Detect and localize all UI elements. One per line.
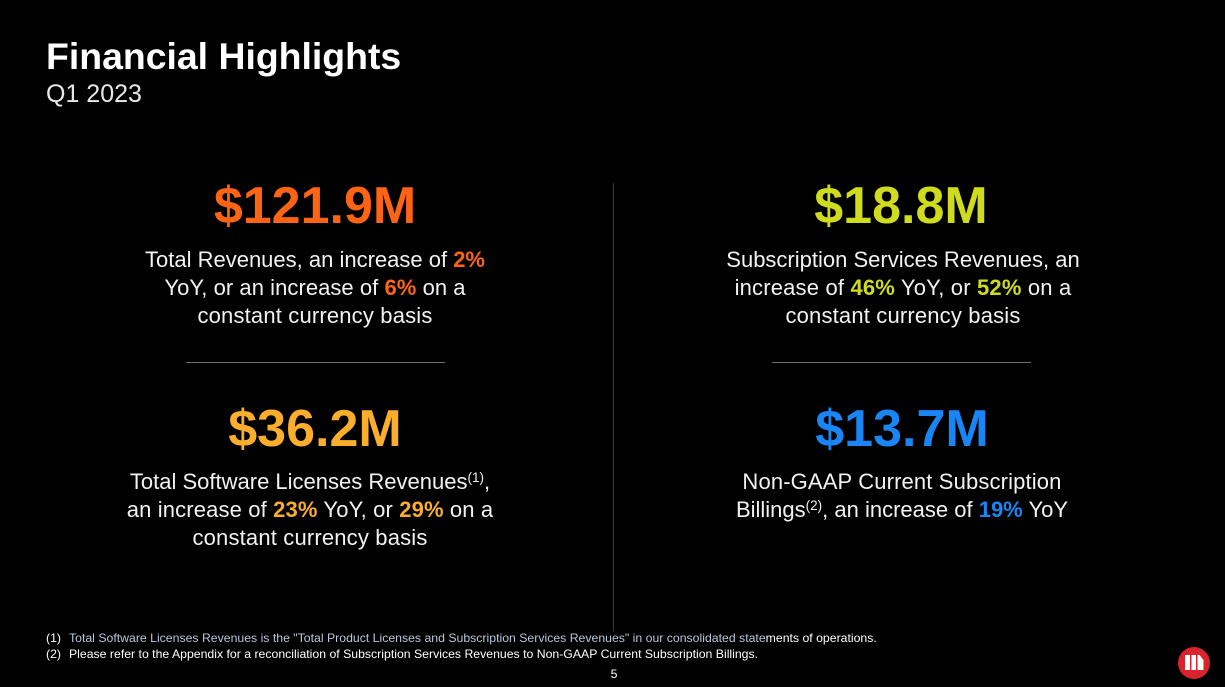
metric: subscription services value: $18.8M [814,177,988,235]
metric: total revenues value: $121.9M [214,177,416,235]
metric: software licenses value: $36.2M [228,400,402,458]
metric: software licenses description: an increase of 23% YoY, or 29% on a [127,497,493,522]
metric: subscription billings description [736,469,1068,522]
vertical divider [613,183,614,631]
metric: software licenses description: constant currency basis [192,525,428,550]
footnote 2: (2) [46,647,61,661]
title: Financial Highlights [46,35,401,77]
metric: subscription billings value: $13.7M [815,400,989,458]
metric: subscription services description: increase of 46% YoY, or 52% on a [735,275,1071,300]
right separator [772,362,1031,363]
subtitle: Q1 2023 [46,80,142,108]
metric: subscription services description [726,247,1080,328]
metric: total revenues description: constant currency basis [197,303,433,328]
metric: software licenses description: Total Software Licenses Revenues(1), [130,469,490,494]
icon: company logo [1178,647,1210,679]
footnote 1: (1) [46,631,61,645]
metric: subscription services description: Subscription Services Revenues, an [726,247,1080,272]
page number: 5 [611,667,617,681]
metric: total revenues description: YoY, or an increase of 6% on a [164,275,466,300]
footnote 2: Please refer to the Appendix for a reconciliation of Subscription Services Revenues to Non-GAAP Current Subscription Billings. [69,647,758,661]
metric: total revenues description: Total Revenues, an increase of 2% [145,247,485,272]
metric: software licenses description [127,469,494,550]
footnote 1: Total Software Licenses Revenues is the "Total Product Licenses and Subscription Services Revenues" in our consolidated statements of operations. [69,631,877,645]
metric: total revenues description [145,247,485,328]
metric: subscription billings description: Billings(2), an increase of 19% YoY [736,497,1068,522]
metric: subscription billings description: Non-GAAP Current Subscription [742,469,1062,494]
metric: subscription services description: constant currency basis [785,303,1021,328]
left separator [186,362,445,363]
